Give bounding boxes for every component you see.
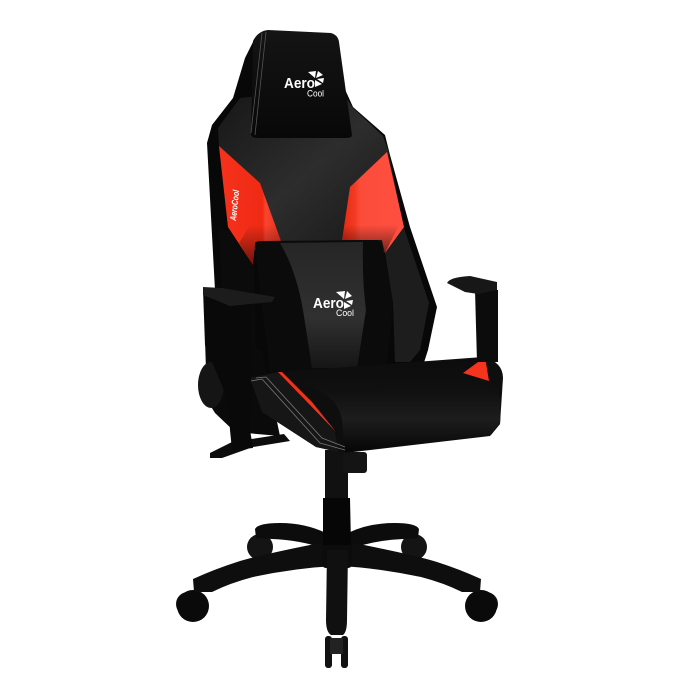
right arm pad: [447, 276, 497, 294]
base: [176, 523, 498, 668]
upper column: [325, 450, 348, 500]
side logo: AeroCool: [228, 189, 241, 222]
headrest logo: Cool: [307, 88, 324, 98]
red panel left: [219, 146, 281, 265]
left and right front legs: [193, 542, 335, 592]
lower column: [323, 498, 351, 545]
rear casters: [247, 534, 427, 560]
left arm pad: [203, 287, 275, 306]
pillow logo: Cool: [336, 308, 354, 318]
right arm post: [475, 290, 498, 362]
height lever knob: [343, 452, 367, 473]
seat red triangle: [463, 357, 489, 381]
side bracket: [205, 340, 280, 436]
pillow logo: [313, 291, 354, 318]
seat cushion top: [300, 358, 500, 452]
front caster: [325, 636, 348, 668]
logo fan: [336, 291, 353, 309]
left arm post: [203, 289, 253, 450]
headrest logo: [284, 71, 324, 98]
rear legs: [255, 523, 419, 549]
lower right side panel: [385, 228, 429, 362]
lower left side panel: [219, 228, 256, 372]
red panel right: [342, 152, 404, 253]
recline wheel: [198, 362, 224, 408]
logo wordmark: Aero: [284, 75, 315, 92]
backrest outer shell: [207, 42, 437, 375]
logo wordmark: Aero: [313, 296, 344, 312]
seat piping: [251, 377, 345, 450]
headrest cushion: [251, 30, 352, 138]
pillow centre panel: [280, 242, 366, 368]
gas column: [323, 450, 367, 545]
recline lever: [210, 434, 290, 458]
seat: [250, 357, 503, 453]
hub: [322, 540, 352, 568]
logo fan: [308, 71, 324, 87]
seat red stripe: [278, 372, 336, 432]
lumbar pillow: [255, 240, 393, 375]
left armrest: [203, 287, 275, 450]
backrest: [207, 42, 437, 375]
red panel left shadow: [239, 225, 281, 265]
right armrest: [447, 276, 498, 362]
front leg: [326, 550, 348, 635]
front casters: [176, 590, 498, 622]
recline wheel and mechanism: [198, 340, 290, 458]
headrest piping: [251, 32, 266, 135]
seat cushion shell: [250, 357, 503, 453]
pillow body: [255, 240, 393, 375]
red panel right shadow: [342, 225, 399, 253]
seat side mesh: [250, 372, 338, 452]
headrest: [251, 30, 352, 138]
backrest centre panel: [218, 88, 404, 253]
